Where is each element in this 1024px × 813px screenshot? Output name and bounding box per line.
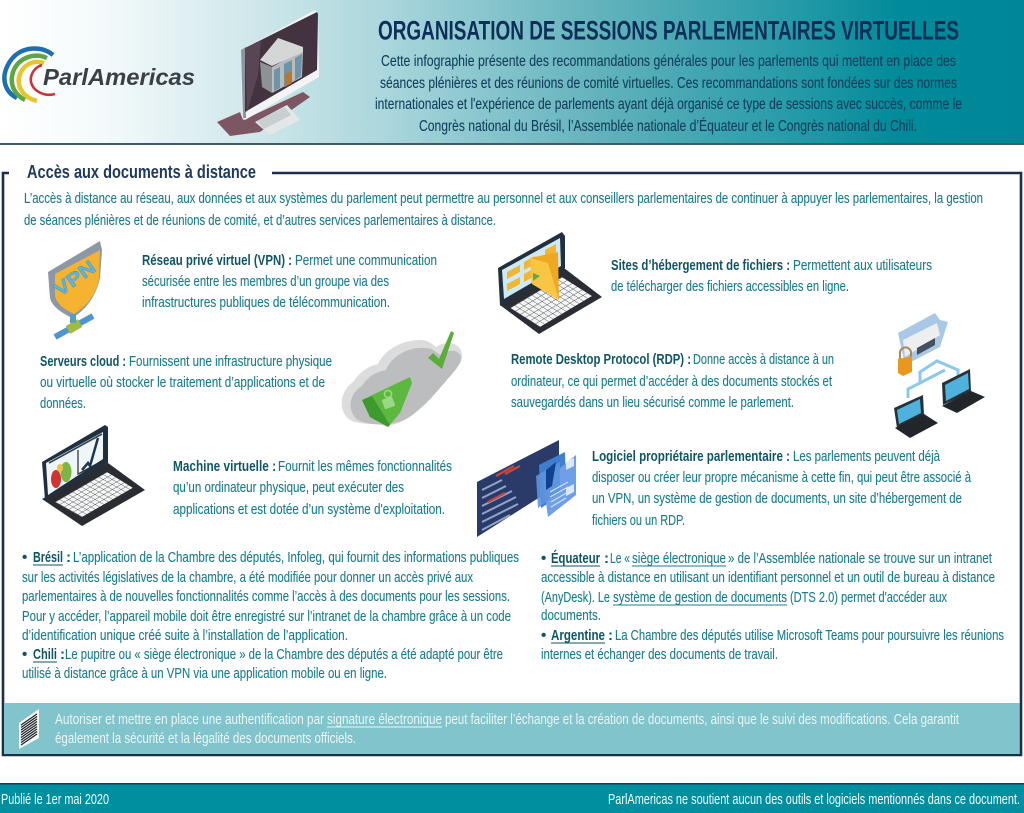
icon: proprietary software: [477, 440, 576, 537]
text: Équateur and Argentine examples: documents.: [541, 607, 601, 624]
logo: ParlAmericas: ParlAmericas: [43, 64, 195, 90]
icon: laptop with charts: [42, 425, 145, 526]
callout: electronic signature: Autoriser et mettre en place une authentification par: [55, 711, 324, 728]
text: Brésil and Chili examples: utilisé à distance grâce à un VPN via une application mobile ou en ligne.: [22, 665, 387, 682]
text: Brésil and Chili examples: Pour y accéder, l’appareil mobile doit être enregistré sur l’intranet de la chambre grâce à un code: [22, 608, 511, 625]
callout: electronic signature: également la sécurité et la légalité des documents officiels.: [55, 730, 356, 747]
text: cloud servers: [40, 353, 332, 412]
callout: electronic signature: signature électronique: [327, 711, 442, 728]
text: Brésil and Chili examples: sur les activités législatives de la chambre, a été modifiée pour donner un accès privé aux: [22, 569, 473, 586]
text: Brésil and Chili examples: parlementaires à de nouvelles fonctionnalités comme l’accès à des documents pour les sessions.: [22, 588, 510, 605]
text: VPN: sécurisée entre les membres d’un groupe via des: [142, 273, 389, 290]
text: Équateur and Argentine examples: :: [604, 550, 609, 567]
text: file hosting: de télécharger des fichiers accessibles en ligne.: [611, 278, 849, 295]
text: virtual machine: [173, 458, 452, 518]
text: Brésil and Chili examples: •: [22, 549, 27, 566]
icon: VPN shield: [48, 241, 102, 337]
text: Brésil and Chili examples: d’identification unique créé suite à l’installation de l’application.: [22, 627, 348, 644]
text: Équateur and Argentine examples: :: [608, 627, 613, 644]
icon: document: [19, 709, 39, 749]
text: Équateur and Argentine examples: •: [541, 627, 546, 644]
text: file hosting: [611, 257, 932, 295]
text: proprietary software: [592, 448, 971, 529]
text: VPN: [142, 252, 437, 311]
text: file hosting: Permettent aux utilisateurs: [793, 257, 932, 274]
text: Brésil and Chili examples: [22, 549, 519, 682]
panel: accès aux documents à distance: [3, 162, 1021, 755]
text: RDP: ordinateur, ce qui permet d’accéder à des documents stockés et: [511, 373, 833, 390]
logo: ParlAmericas: [4, 48, 195, 101]
intro text: [375, 53, 962, 135]
callout: electronic signature: [4, 703, 1020, 754]
text: Brésil and Chili examples: L’application de la Chambre des députés, Infoleg, qui fournit des informations publiques: [73, 549, 519, 566]
text: virtual machine: Fournit les mêmes fonctionnalités: [278, 458, 452, 475]
text: Équateur and Argentine examples: Le «: [610, 550, 630, 567]
text: virtual machine: applications et est dotée d’un système d'exploitation.: [173, 501, 445, 518]
text: Brésil and Chili examples: Chili: [33, 646, 57, 663]
text: Brésil and Chili examples: :: [60, 646, 65, 663]
text: VPN: Réseau privé virtuel (VPN) :: [142, 252, 292, 269]
icon: file hosting laptop: [498, 232, 602, 334]
text: proprietary software: Les parlements peuvent déjà: [793, 448, 940, 465]
text: Brésil and Chili examples: •: [22, 646, 27, 663]
text: Équateur and Argentine examples: siège électronique: [632, 550, 726, 567]
text: proprietary software: fichiers ou un RDP.: [592, 512, 685, 529]
text: Équateur and Argentine examples: système de gestion de documents: [613, 589, 787, 606]
text: RDP: [511, 351, 834, 411]
text: Équateur and Argentine examples: [541, 550, 1004, 663]
text: cloud servers: Serveurs cloud :: [40, 353, 126, 370]
text: VPN: Permet une communication: [295, 252, 437, 269]
text: cloud servers: données.: [40, 395, 86, 412]
text: Équateur and Argentine examples: internes et échanger des documents de travail.: [541, 646, 778, 663]
text: cloud servers: Fournissent une infrastructure physique: [129, 353, 332, 370]
text: cloud servers: ou virtuelle où stocker le traitement d’applications et de: [40, 374, 325, 391]
text: VPN: infrastructures publiques de télécommunication.: [142, 294, 390, 311]
text: Brésil and Chili examples: :: [66, 549, 71, 566]
text: Brésil and Chili examples: Le pupitre ou « siège électronique » de la Chambre des députés a été adapté pour être: [65, 646, 503, 663]
text: Équateur and Argentine examples: (DTS 2.0) permet d'accéder aux: [790, 589, 947, 606]
text: Équateur and Argentine examples: (AnyDesk). Le: [541, 589, 610, 606]
text: RDP: Remote Desktop Protocol (RDP) :: [511, 351, 691, 368]
icon: remote desktop network: [894, 313, 985, 438]
text: Équateur and Argentine examples: Équateur: [551, 550, 600, 567]
heading: Accès aux documents à distance: [27, 162, 256, 182]
footer: [0, 783, 1024, 813]
panel intro text: [24, 190, 983, 229]
icon: monitor with parliament building: [217, 10, 319, 136]
text: Brésil and Chili examples: Brésil: [33, 549, 63, 566]
icon: cloud with shield: [342, 331, 462, 427]
icon: VPN shield: VPN: [51, 257, 100, 301]
header banner: [0, 0, 1024, 145]
text: virtual machine: Machine virtuelle :: [173, 458, 276, 475]
text: virtual machine: qu’un ordinateur physique, peut exécuter des: [173, 479, 404, 496]
text: file hosting: Sites d’hébergement de fichiers :: [611, 257, 790, 274]
text: Équateur and Argentine examples: Argentine: [551, 627, 605, 644]
text: proprietary software: Logiciel propriétaire parlementaire :: [592, 448, 790, 465]
publication date: Publié le 1er mai 2020: [1, 791, 109, 808]
text: RDP: Donne accès à distance à un: [693, 351, 834, 368]
panel intro text: de séances plénières et de réunions de comité, et d’autres services parlementaires à distance.: [24, 212, 496, 229]
text: Équateur and Argentine examples: •: [541, 550, 546, 567]
text: RDP: sauvegardés dans un lieu sécurisé comme le parlement.: [511, 394, 794, 411]
